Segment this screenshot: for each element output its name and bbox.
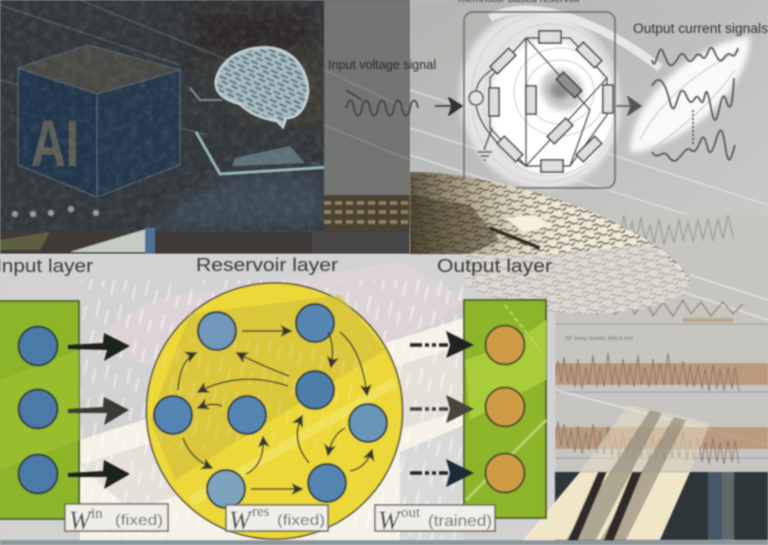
arrow: output weights bbox=[410, 331, 474, 487]
icon: output nodes bbox=[486, 326, 524, 492]
panel: time series charts: 10^ Delay System, With A Tent bbox=[565, 336, 633, 342]
icon: memristors bbox=[489, 31, 613, 172]
text: input voltage label: Input voltage signal bbox=[328, 58, 436, 72]
icon: input nodes bbox=[18, 326, 58, 494]
arrow: reservoir connections bbox=[178, 331, 372, 489]
panel: gray overlay strip bbox=[324, 0, 410, 232]
label: W in fixed: W bbox=[69, 506, 93, 535]
icon: glowing brain bbox=[216, 47, 308, 127]
texture: photo grain bbox=[0, 0, 324, 232]
panel: input layer bbox=[0, 301, 79, 519]
chart: lower trace bbox=[555, 427, 768, 449]
label: W out trained: out bbox=[401, 505, 421, 521]
panel: circuit background bbox=[410, 0, 768, 270]
arrow: into circuit bbox=[435, 98, 462, 115]
chart: top trace bbox=[620, 215, 733, 245]
heading: reservoir layer: Reservoir layer bbox=[196, 255, 338, 275]
panel: output layer bbox=[464, 300, 546, 518]
chart: middle trace bbox=[555, 363, 768, 385]
chart: output waves bbox=[652, 48, 738, 161]
arrow: input weights bbox=[68, 333, 130, 489]
label: W res fixed: W bbox=[229, 506, 253, 535]
panel: dark AI chip photo bbox=[0, 0, 410, 254]
heading: output layer: Output layer bbox=[437, 256, 552, 276]
icon: reservoir nodes bbox=[154, 304, 387, 508]
label: W out trained: W bbox=[378, 506, 402, 535]
text: output current label: Output current signals bbox=[633, 21, 768, 36]
icon: white attractor swirl bbox=[439, 0, 750, 208]
icon: AI cube: AI bbox=[31, 106, 79, 180]
label: W res fixed bbox=[226, 504, 328, 535]
icon: beige stripes bbox=[523, 405, 710, 540]
label: W res fixed: (fixed) bbox=[277, 512, 325, 529]
icon: chip platform bbox=[190, 88, 331, 174]
diagram: memristor circuit bbox=[464, 12, 615, 188]
label: W out trained: (trained) bbox=[428, 513, 492, 530]
icon: AI cube bbox=[18, 45, 180, 197]
panel: dark lower-right photo bbox=[555, 472, 768, 540]
arrow: out of circuit bbox=[616, 97, 641, 115]
icon: input wave bbox=[346, 90, 418, 116]
panel: PCB oval bbox=[410, 172, 690, 313]
label: W in fixed: (fixed) bbox=[115, 512, 163, 529]
panel: time series charts bbox=[555, 215, 768, 472]
label: W res fixed: res bbox=[252, 504, 270, 520]
label: W out trained bbox=[375, 505, 495, 535]
panel: lower layers background bbox=[0, 254, 768, 545]
label: W in fixed bbox=[65, 504, 168, 535]
panel: reservoir layer bbox=[146, 283, 402, 539]
label: W in fixed: in bbox=[91, 506, 103, 522]
icon: bright dots along chip edge bbox=[12, 206, 99, 217]
